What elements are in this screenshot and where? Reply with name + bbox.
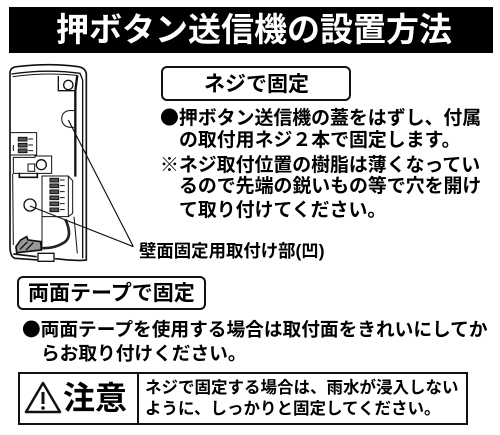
screw fixing instructions: ●押ボタン送信機の蓋をはずし、付属	[160, 103, 481, 130]
screw fixing instructions: るので先端の鋭いもの等で穴を開け	[179, 176, 481, 197]
screw fixing instructions: の取付用ネジ２本で固定します。	[179, 130, 460, 151]
screw fixing instructions: て取り付けてください。	[179, 200, 386, 221]
tape instructions: ●両面テープを使用する場合は取付面をきれいにしてか	[22, 315, 488, 342]
heading box: double-sided tape	[17, 276, 206, 310]
middle mounting post	[13, 156, 52, 177]
upper mounting post	[58, 76, 75, 91]
caution box	[18, 372, 468, 425]
connector	[13, 237, 54, 261]
cable	[39, 219, 69, 248]
upper recess	[62, 111, 74, 127]
heading text: ネジで固定	[204, 73, 309, 96]
left switch block	[11, 133, 37, 155]
caution text	[145, 378, 458, 418]
heading text: 両面テープで固定	[28, 282, 195, 305]
label: wall mounting recess: 壁面固定用取付け部(凹)	[139, 241, 324, 261]
screw fixing instructions	[160, 103, 481, 221]
leader lines	[30, 120, 133, 247]
caution text: ネジで固定する場合は、雨水が浸入しない	[145, 379, 458, 397]
caution word: 注意	[63, 380, 127, 416]
heading box: screw fixing	[161, 66, 351, 101]
tape instructions	[22, 315, 488, 364]
screw fixing instructions: ※ネジ取付位置の樹脂は薄くなってい	[160, 150, 480, 177]
device casing	[10, 65, 86, 260]
lower recess	[24, 199, 36, 211]
caution text: ように、しっかりと固定してください。	[145, 400, 441, 418]
vertical divider	[137, 374, 139, 423]
inner divider	[13, 174, 42, 247]
tape instructions: らお取り付けください。	[41, 343, 247, 364]
title banner	[9, 7, 493, 53]
lower switch block	[42, 176, 73, 217]
warning icon	[24, 382, 62, 414]
title text: 押ボタン送信機の設置方法	[56, 11, 452, 48]
